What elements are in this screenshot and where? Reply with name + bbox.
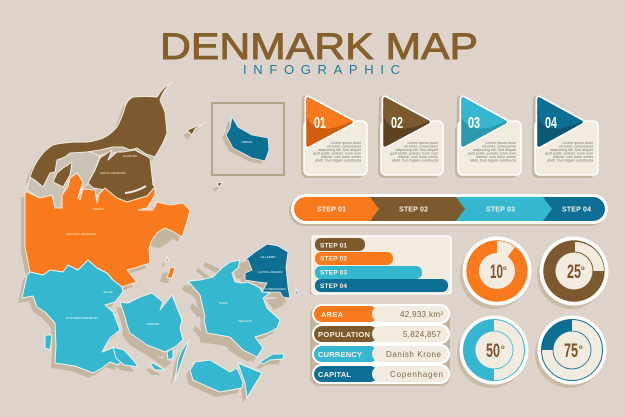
bar labels: STEP 01 (320, 242, 347, 250)
card 02: adipiscing elit. Sed aliquet (395, 148, 438, 152)
donut: 75 percent: 75 (564, 341, 578, 362)
fact: capital: CAPITAL (318, 370, 351, 379)
fact: area (312, 304, 450, 324)
card 03: abdit. Duo fugam constructa (470, 158, 517, 162)
fact: population: POPULATION (318, 330, 370, 339)
fact: currency (312, 344, 450, 364)
region: Zealand: SORØ (219, 301, 228, 305)
inset: Bornholm (212, 103, 284, 175)
region: Capital (245, 244, 298, 298)
region: Southern Denmark: VEJLE (103, 290, 113, 294)
fact: capital: Copenhagen (390, 370, 443, 379)
bar chart panel (310, 236, 451, 295)
donut: 50 percent: o (501, 345, 505, 351)
donut: 10 percent (460, 236, 532, 309)
step 04 segment (540, 197, 605, 221)
bar labels: STEP 02 (320, 256, 347, 262)
donut: 75 percent: o (579, 345, 583, 351)
fact: capital (312, 364, 450, 384)
card 01: Lorem ipsum dolor (330, 141, 362, 145)
donut: 25 percent (537, 236, 608, 309)
map of Denmark (18, 82, 298, 403)
card 03: quid pellet, poiesis. Eam num (468, 152, 516, 156)
bar: step 04 (315, 279, 448, 292)
card 01: abdit. Duo fugam constructa (315, 158, 362, 162)
donut: 50 percent: 50 (486, 341, 500, 362)
card 03: sit amet, consectetur (482, 144, 517, 148)
Limfjord waters (27, 151, 100, 208)
card 04: adipiscing elit. Sed aliquet (550, 148, 593, 152)
card 04: quid pellet, poiesis. Eam num (545, 152, 593, 156)
donut: 50 percent (457, 316, 528, 388)
step labels: STEP 04 (562, 206, 591, 214)
card 04: 04 (545, 115, 557, 132)
step labels: STEP 01 (317, 206, 346, 214)
region: Capital: COPENHAGEN (264, 287, 286, 291)
region: Capital: CAPITAL REGION (258, 270, 282, 274)
region: Zealand: ZEALAND (238, 319, 253, 323)
card 03: 03 (468, 115, 480, 132)
card 03: adipiscing elit. Sed aliquet (473, 148, 516, 152)
region: Central Denmark: CENTRAL DENMARK (66, 232, 96, 236)
bar labels: STEP 03 (320, 270, 347, 276)
fact: area: AREA (321, 310, 344, 319)
card 02: Lorem ipsum dolor (407, 141, 439, 145)
donut: 75 percent (535, 316, 606, 388)
region: North Denmark: AALBORG (123, 154, 138, 158)
card 03: Lorem ipsum dolor (485, 141, 517, 145)
card 04: edisse, cum dolor omnis (553, 155, 593, 159)
region: North Denmark: NORTH DENMARK (100, 171, 126, 175)
card 01: quid pellet, poiesis. Eam num (313, 152, 361, 156)
bar: step 03 (315, 266, 422, 279)
facts table (310, 304, 450, 386)
region: Capital: HILLERØD (260, 255, 276, 259)
step 02 segment (368, 197, 465, 221)
card 04: abdit. Duo fugam constructa (547, 158, 594, 162)
donut: 25 percent: 25 (567, 262, 581, 283)
card 04: sit amet, consectetur (559, 144, 594, 148)
region: Central Denmark (25, 173, 190, 287)
card 01: adipiscing elit. Sed aliquet (318, 148, 361, 152)
region: Zealand (188, 260, 284, 398)
card 01: edisse, cum dolor omnis (321, 155, 361, 159)
fact: currency: Danish Krone (386, 350, 442, 359)
step timeline bar (289, 194, 608, 226)
card 01: 01 (314, 115, 326, 132)
donut: 25 percent: o (581, 266, 585, 272)
step labels: STEP 03 (486, 206, 515, 214)
card 02: quid pellet, poiesis. Eam num (390, 152, 438, 156)
card 04: Lorem ipsum dolor (562, 141, 594, 145)
step 03 segment (455, 197, 552, 221)
region: North Denmark (30, 82, 223, 202)
card 03: edisse, cum dolor omnis (476, 155, 516, 159)
bar labels: STEP 04 (320, 283, 347, 290)
region: Southern Denmark (22, 260, 189, 381)
fact: population (312, 324, 450, 344)
bar: step 02 (315, 252, 393, 265)
title: DENMARK MAP (160, 26, 478, 67)
fact: population: 5,824,857 (403, 330, 442, 339)
region: Southern Denmark: SOUTHERN DENMARK (66, 316, 98, 320)
bar labels (320, 242, 347, 290)
step labels (317, 206, 591, 214)
region: Central Denmark: VIBORG (92, 207, 104, 211)
step 01 segment (294, 197, 379, 221)
subtitle: INFOGRAPHIC (243, 62, 400, 77)
fact: area: 42,933 km² (400, 310, 443, 319)
card 02: sit amet, consectetur (404, 144, 439, 148)
map shadow (18, 87, 286, 403)
small islands and coastal strips (28, 230, 284, 368)
donut: 10 percent: o (503, 266, 507, 272)
bar: step 01 (315, 238, 365, 251)
card 03 (455, 97, 521, 178)
card 04 (532, 97, 598, 178)
card 02: 02 (391, 115, 403, 132)
card 02 (378, 97, 443, 178)
region: Southern Denmark: ODENSE (147, 322, 159, 326)
donut: 10 percent: 10 (490, 262, 503, 283)
card 01 (301, 97, 367, 178)
step labels: STEP 02 (399, 206, 428, 214)
card 01: sit amet, consectetur (327, 144, 362, 148)
inset: Bornholm: RØNNE (242, 140, 252, 144)
card 02: edisse, cum dolor omnis (398, 155, 438, 159)
card 02: abdit. Duo fugam constructa (392, 158, 439, 162)
fact: currency: CURRENCY (318, 350, 362, 359)
